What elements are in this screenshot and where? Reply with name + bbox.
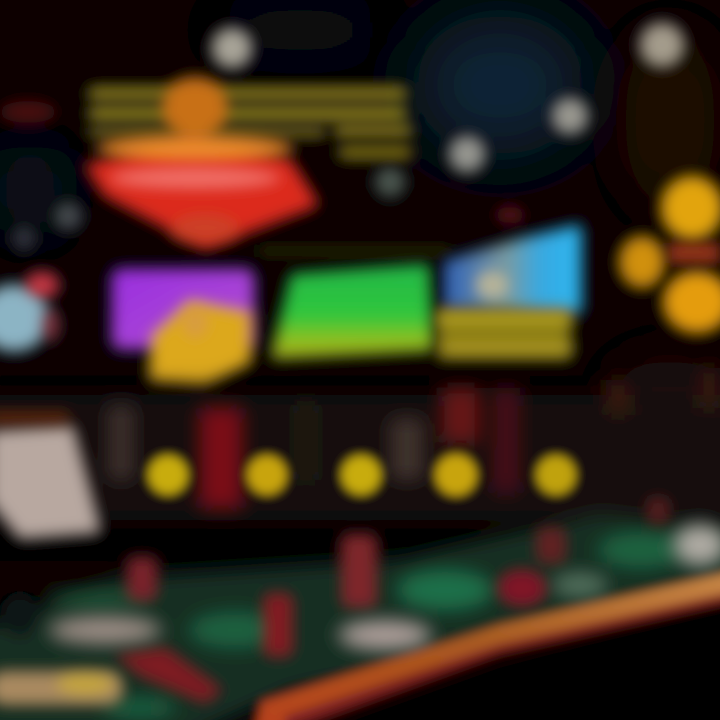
sign: red and orange diamond: [86, 136, 318, 248]
table: orange rainbow edge: [255, 570, 720, 720]
sign: yellow marquee at top left: [90, 78, 410, 158]
sign: yellow strip below blue screen: [438, 308, 570, 358]
background: night sky and wall glow: [0, 5, 720, 440]
table: green gaming surface: [0, 512, 720, 720]
sign: golden cluster at right: [620, 177, 720, 332]
machines: dark row of slot cabinets: [0, 368, 720, 550]
sign: blue and red fragment at far left: [0, 273, 58, 350]
screen: green panel: [272, 265, 432, 358]
screen: blue panel: [445, 226, 580, 312]
lights: row of yellow lamps: [149, 455, 575, 495]
accent: small red light above screens: [496, 207, 524, 223]
sign: gold panel in front of purple screen: [150, 300, 250, 384]
foreground: black floor at lower right: [300, 605, 720, 720]
table: gold and white corner at lower left: [0, 595, 122, 704]
chips: red stacks on the table: [115, 498, 669, 703]
strip: olive band above screens: [260, 248, 450, 254]
lights: white globes at top: [13, 24, 683, 249]
accent: small red sign at far left: [0, 101, 56, 123]
panel: white screen at lower left: [0, 412, 100, 538]
screen: purple panel: [113, 270, 253, 348]
